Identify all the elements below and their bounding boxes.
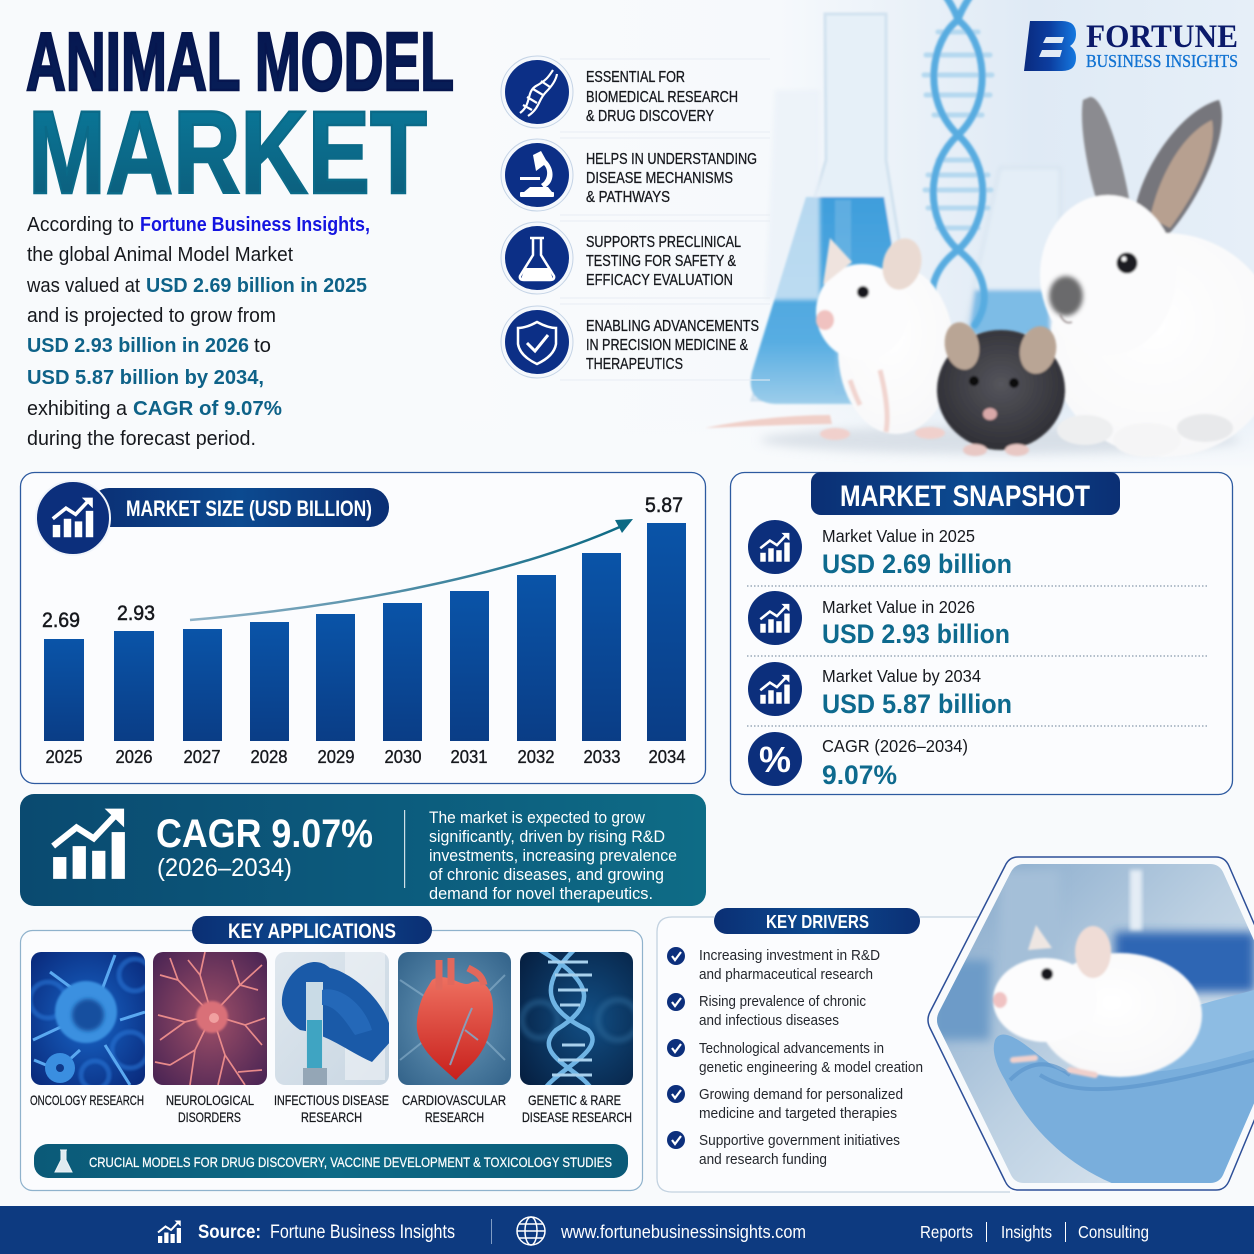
icon: globe: [517, 1217, 545, 1245]
CAGR banner: [20, 794, 706, 906]
footer: [0, 1206, 1254, 1254]
feature: preclinical testing: [501, 222, 741, 294]
driver items: Growing demand for personalized: [699, 1086, 903, 1103]
year labels: [46, 747, 686, 767]
CAGR description: demand for novel therapeutics.: [429, 884, 653, 903]
year labels: 2034: [648, 747, 686, 767]
key drivers heading: [714, 908, 920, 934]
application labels: CARDIOVASCULAR: [402, 1092, 506, 1108]
application labels: INFECTIOUS DISEASE: [274, 1092, 389, 1108]
driver items: Increasing investment in R&D: [699, 947, 880, 964]
value labels: 5.87: [645, 494, 683, 517]
feature: biomedical research: ESSENTIAL FOR: [586, 69, 685, 86]
application labels: RESEARCH: [301, 1109, 362, 1125]
floor shadow: [760, 426, 1240, 454]
CAGR description: [429, 808, 677, 903]
footer links: Insights: [1001, 1222, 1052, 1242]
driver items: medicine and targeted therapies: [699, 1105, 897, 1122]
CAGR description: The market is expected to grow: [429, 808, 646, 827]
feature: preclinical testing: TESTING FOR SAFETY &: [586, 253, 736, 270]
logo wordmark: FORTUNE: [1086, 19, 1238, 55]
crucial models strip: CRUCIAL MODELS FOR DRUG DISCOVERY, VACCINE DEVELOPMENT & TOXICOLOGY STUDIES: [89, 1154, 612, 1170]
logo mark: [1024, 21, 1076, 71]
year labels: 2026: [116, 747, 152, 767]
DNA helix background: [924, 0, 992, 325]
key applications heading: KEY APPLICATIONS: [228, 920, 396, 943]
driver items: Technological advancements in: [699, 1040, 884, 1057]
driver items: and pharmaceutical research: [699, 966, 873, 983]
driver items: Rising prevalence of chronic: [699, 993, 866, 1010]
intro paragraph: According to: [27, 214, 134, 236]
driver items: and research funding: [699, 1151, 827, 1168]
application labels: RESEARCH: [425, 1109, 484, 1125]
title: [26, 15, 454, 219]
large flask: [751, 14, 925, 404]
source: Fortune Business Insights: [270, 1222, 455, 1243]
intro paragraph: was valued at: [26, 275, 140, 297]
snapshot: CAGR: %: [759, 739, 791, 780]
intro paragraph: during the forecast period.: [27, 428, 256, 450]
website: www.fortunebusinessinsights.com: [560, 1222, 806, 1242]
glove: [994, 1034, 1254, 1183]
source: [198, 1222, 455, 1243]
intro paragraph: to: [254, 335, 271, 357]
driver items: genetic engineering & model creation: [699, 1059, 923, 1076]
image: oncology cell: [30, 952, 151, 1089]
CAGR description: of chronic diseases, and growing: [429, 865, 664, 884]
snapshot: 2025: USD 2.69 billion: [822, 549, 1012, 579]
title: ANIMAL MODEL: [26, 15, 454, 108]
intro paragraph: USD 5.87 billion by 2034,: [27, 367, 264, 389]
photo: rat in gloved hand: [928, 857, 1254, 1190]
snapshot: 2025: [748, 520, 1012, 579]
heading pill: [90, 488, 389, 527]
feature: biomedical research: [501, 56, 738, 128]
crucial models strip: [34, 1144, 628, 1178]
intro paragraph: and is projected to grow from: [27, 305, 276, 327]
value labels: [42, 494, 683, 632]
intro paragraph: the global Animal Model Market: [27, 244, 293, 266]
driver items: and infectious diseases: [699, 1012, 839, 1029]
black mouse: [937, 319, 1065, 456]
feature: precision medicine: [501, 306, 759, 378]
snapshot: 2034: [748, 662, 1012, 719]
key applications heading: [192, 916, 432, 944]
intro paragraph: [26, 214, 370, 450]
year labels: 2028: [250, 747, 288, 767]
panel: key applications: [20, 916, 642, 1190]
source: Source:: [198, 1222, 261, 1243]
application labels: GENETIC & RARE: [528, 1092, 621, 1108]
image: heart: [398, 952, 511, 1085]
logo: [1024, 19, 1238, 71]
year labels: 2025: [46, 747, 82, 767]
footer links: Reports: [920, 1222, 973, 1242]
snapshot: CAGR: CAGR (2026–2034): [822, 736, 968, 756]
value labels: 2.69: [42, 609, 80, 632]
logo: BUSINESS INSIGHTS: [1086, 51, 1238, 71]
snapshot: 2025: Market Value in 2025: [822, 526, 975, 546]
footer links: Consulting: [1078, 1222, 1149, 1242]
footer links: [920, 1222, 1149, 1242]
feature: disease mechanisms: [501, 139, 757, 211]
feature: biomedical research: & DRUG DISCOVERY: [586, 108, 714, 125]
CAGR description: significantly, driven by rising R&D: [429, 827, 665, 846]
snapshot heading: MARKET SNAPSHOT: [840, 480, 1090, 513]
feature: disease mechanisms: & PATHWAYS: [586, 189, 670, 206]
panel: market size bar chart: [20, 472, 706, 784]
year labels: 2030: [384, 747, 422, 767]
snapshot: CAGR: [748, 732, 968, 790]
feature list: [501, 56, 770, 380]
rat: [993, 925, 1202, 1077]
title: MARKET: [28, 87, 427, 219]
icon: growth chart: [53, 809, 125, 879]
year labels: 2029: [318, 747, 354, 767]
image: DNA strand: [520, 950, 638, 1090]
year labels: 2033: [584, 747, 620, 767]
CAGR period: (2026–2034): [157, 854, 292, 882]
white mouse: [816, 234, 954, 440]
application labels: ONCOLOGY RESEARCH: [30, 1092, 144, 1108]
heading pill: MARKET SIZE (USD BILLION): [126, 496, 372, 521]
growth arrow: [190, 519, 633, 620]
snapshot: 2026: [748, 591, 1010, 649]
panel: key drivers: [657, 908, 1037, 1192]
application labels: DISORDERS: [178, 1109, 241, 1125]
bars: [44, 523, 686, 741]
snapshot: 2034: USD 5.87 billion: [822, 689, 1012, 719]
application labels: NEUROLOGICAL: [166, 1092, 254, 1108]
intro paragraph: exhibiting a: [27, 398, 128, 420]
CAGR value: CAGR 9.07%: [156, 812, 373, 856]
application labels: DISEASE RESEARCH: [522, 1109, 632, 1125]
snapshot: CAGR: 9.07%: [822, 760, 897, 790]
driver items: [667, 947, 923, 1168]
feature: disease mechanisms: HELPS IN UNDERSTANDING: [586, 151, 757, 168]
feature: precision medicine: IN PRECISION MEDICINE &: [586, 337, 748, 354]
feature: disease mechanisms: DISEASE MECHANISMS: [586, 170, 733, 187]
feature: biomedical research: BIOMEDICAL RESEARCH: [586, 89, 738, 106]
application labels: [30, 1092, 632, 1125]
CAGR description: investments, increasing prevalence: [429, 846, 677, 865]
year labels: 2031: [450, 747, 488, 767]
icon: footer chart: [158, 1220, 181, 1243]
panel: market snapshot: [730, 472, 1232, 794]
feature: preclinical testing: SUPPORTS PRECLINICAL: [586, 234, 741, 251]
feature: preclinical testing: EFFICACY EVALUATION: [586, 272, 733, 289]
snapshot: 2026: USD 2.93 billion: [822, 619, 1010, 649]
intro paragraph: USD 2.93 billion in 2026: [27, 335, 249, 357]
year labels: 2027: [184, 747, 220, 767]
intro paragraph: USD 2.69 billion in 2025: [146, 275, 367, 297]
snapshot: 2034: Market Value by 2034: [822, 666, 981, 686]
driver items: Supportive government initiatives: [699, 1132, 900, 1149]
tail: [705, 415, 832, 428]
snapshot: 2026: Market Value in 2026: [822, 597, 975, 617]
snapshot heading: [811, 472, 1120, 515]
intro paragraph: Fortune Business Insights,: [140, 214, 370, 236]
value labels: 2.93: [117, 602, 155, 625]
image: neuron: [153, 952, 267, 1085]
feature: precision medicine: THERAPEUTICS: [586, 356, 683, 373]
intro paragraph: CAGR of 9.07%: [133, 398, 282, 420]
small flask: [765, 90, 1060, 335]
image: gloved hand with test tube: [275, 950, 392, 1085]
icon: chart: [36, 481, 110, 555]
rabbit: [1040, 97, 1254, 457]
key drivers heading: KEY DRIVERS: [766, 911, 869, 932]
hero photo: lab glassware and animals: [460, 0, 1254, 470]
feature: precision medicine: ENABLING ADVANCEMENTS: [586, 318, 759, 335]
year labels: 2032: [518, 747, 554, 767]
